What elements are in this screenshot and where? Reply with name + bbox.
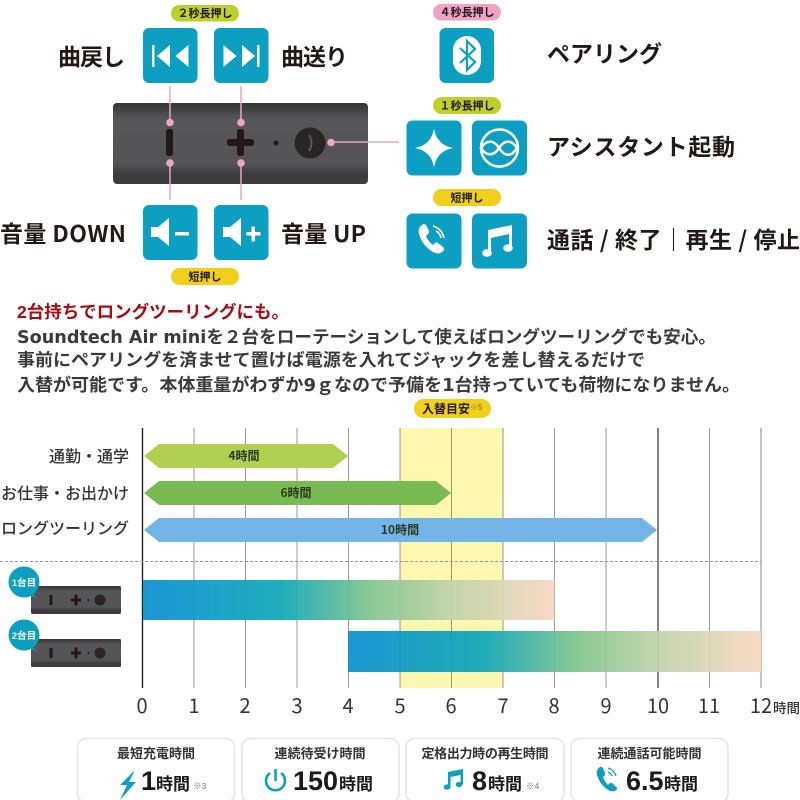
- pill: short press right: [433, 189, 501, 206]
- axis labels: 2: [239, 690, 251, 719]
- label: long touring: ロングツーリング: [1, 520, 129, 538]
- callout: second unit: 2台目: [12, 630, 36, 642]
- arrow bar: long touring 10 hours: [144, 518, 657, 542]
- card: standby time: 時間: [339, 775, 373, 794]
- device: earphone remote: [113, 103, 368, 184]
- bar: first unit timeline: [143, 580, 554, 620]
- callout: first unit: [8, 566, 40, 598]
- axis labels: 6: [445, 690, 457, 719]
- card: talk time: [571, 738, 728, 800]
- pill: replacement guide: ※5: [470, 403, 483, 412]
- card: playback time: 8: [472, 766, 487, 796]
- icon: infinity assistant: [472, 120, 527, 176]
- icon: previous track: [143, 28, 198, 83]
- highlight: replacement window: [400, 428, 503, 688]
- pill: short press bottom: 短押し: [188, 270, 222, 284]
- label: previous track: 曲戻し: [58, 38, 125, 72]
- text block: two-unit touring description: 事前にペアリングを済ませて置けば電源を入れてジャックを差し替えるだけで: [17, 350, 645, 371]
- arrow bar: work 6 hours: 6時間: [280, 484, 312, 501]
- arrow bar: long touring 10 hours: 10時間: [381, 521, 419, 538]
- bar: second unit timeline: [348, 631, 761, 672]
- icon: volume down: [143, 205, 198, 260]
- axis labels: 3: [291, 690, 303, 719]
- card: playback time: 定格出力時の再生時間: [422, 746, 548, 761]
- axis labels: 5: [394, 690, 406, 719]
- device: second unit: [31, 639, 121, 667]
- icon: volume up: [214, 205, 268, 260]
- card: talk time: 6.5: [626, 766, 664, 796]
- card: charging time: 1: [141, 766, 156, 796]
- arrow bar: commute 4 hours: 4時間: [228, 447, 260, 464]
- text block: two-unit touring description: 2台持ちでロングツーリングにも。: [17, 302, 289, 322]
- axis labels: 7: [497, 690, 509, 719]
- axis labels: 12: [750, 690, 772, 719]
- pill: short press bottom: [171, 268, 239, 285]
- card: standby time: 連続待受け時間: [274, 746, 366, 761]
- card: playback time: [406, 738, 564, 800]
- callout: first unit: 1台目: [12, 577, 36, 589]
- axis labels: 0: [136, 690, 148, 719]
- label: work: お仕事・お出かけ: [1, 485, 129, 503]
- label: volume down: 音量 DOWN: [0, 215, 126, 249]
- label: commute: 通勤・通学: [49, 448, 129, 466]
- pill: replacement guide: 入替目安: [422, 402, 470, 416]
- axis labels: 時間: [773, 701, 800, 716]
- axis labels: 8: [548, 690, 560, 719]
- axis labels: 11: [698, 690, 720, 719]
- arrow bar: work 6 hours: [144, 481, 451, 505]
- pill: 1 second press: １秒長押し: [440, 98, 494, 112]
- pill: 4 second press: ４秒長押し: [440, 5, 494, 19]
- icon: bluetooth: [440, 28, 494, 83]
- card: charging time: ※3: [193, 781, 207, 791]
- pill: 2 second press: ２秒長押し: [178, 6, 232, 20]
- card: playback time: 時間: [488, 775, 522, 794]
- card: charging time: 最短充電時間: [117, 746, 195, 761]
- card: standby time: 150: [293, 766, 338, 796]
- pill: short press right: 短押し: [450, 190, 484, 204]
- icon: music note: [472, 214, 527, 268]
- pill: 4 second press: [433, 4, 501, 20]
- pill: replacement guide: [414, 399, 491, 418]
- icon: sparkle assistant: [406, 120, 462, 176]
- card: standby time: [242, 738, 399, 800]
- axis labels: 9: [600, 690, 612, 719]
- axis labels: 4: [342, 690, 354, 719]
- card: charging time: [78, 738, 234, 800]
- card: charging time: 時間: [156, 775, 190, 794]
- icon: phone call: [406, 214, 462, 268]
- connector lines: [166, 86, 399, 200]
- pill: 1 second press: [433, 97, 501, 114]
- label: pairing: ペアリング: [547, 35, 662, 69]
- text block: two-unit touring description: Soundtech Air miniを２台をローテーションして使えばロングツーリングでも安心。: [17, 327, 716, 348]
- label: next track: 曲送り: [281, 38, 348, 72]
- card: playback time: ※4: [526, 781, 540, 791]
- card: talk time: 連続通話可能時間: [597, 746, 702, 761]
- device: first unit: [31, 586, 121, 614]
- label: assistant: アシスタント起動: [547, 128, 735, 162]
- label: volume up: 音量 UP: [281, 215, 366, 249]
- text block: two-unit touring description: [17, 302, 740, 396]
- icon: next track: [214, 28, 268, 83]
- pill: 2 second press: [171, 5, 239, 22]
- card: talk time: 時間: [664, 775, 698, 794]
- axis labels: 1: [188, 690, 200, 719]
- arrow bar: commute 4 hours: [144, 444, 348, 468]
- axis labels: 10: [647, 690, 669, 719]
- axis labels: [136, 690, 800, 719]
- callout: second unit: [8, 620, 40, 651]
- text block: two-unit touring description: 入替が可能です。本体重量がわずか9ｇなので予備を1台持っていても荷物になりません。: [17, 375, 740, 396]
- label: call and playback: 通話 / 終了｜再生 / 停止: [547, 221, 800, 255]
